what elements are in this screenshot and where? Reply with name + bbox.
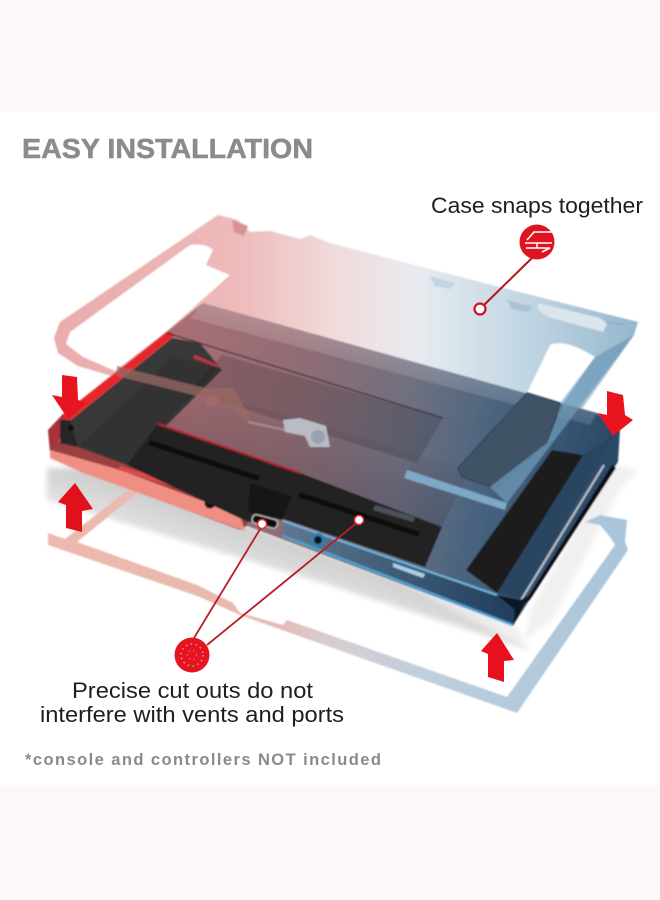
- arrow: down right: [598, 391, 633, 436]
- label: precise cut outs: Precise cut outs do not: [72, 678, 313, 703]
- left lower rim with jack: [50, 445, 248, 531]
- strip and latch over console: [117, 366, 330, 447]
- controller right: [466, 450, 583, 593]
- arrow: up left: [58, 483, 93, 532]
- plate lower edge: [158, 424, 300, 473]
- bottom band: [0, 785, 660, 900]
- translucent top case: [54, 215, 638, 440]
- arrow: down left: [52, 375, 86, 419]
- lower case half: [48, 490, 628, 713]
- product illustration: exploded case and console: [47, 215, 638, 713]
- kickstand panel: [190, 355, 443, 463]
- label: case snaps together: Case snaps together: [431, 193, 643, 218]
- callout: cut outs dot and leaders: [174, 516, 364, 672]
- lower edge of top case: [404, 470, 507, 510]
- left dark area: [60, 338, 222, 465]
- right window over console: [458, 393, 560, 488]
- callout: case snaps icon and leader: [474, 224, 554, 314]
- console reflection: [47, 465, 638, 650]
- top band: [0, 0, 660, 112]
- right case leg: [490, 335, 634, 503]
- footnote: *console and controllers NOT included: [25, 751, 381, 769]
- controller left: [78, 357, 218, 465]
- blue lower rim: [283, 520, 515, 626]
- console body: [48, 303, 620, 626]
- arrow: up right: [481, 633, 514, 682]
- vent block: [127, 424, 442, 567]
- usb-c port: [251, 514, 279, 529]
- left corner rim: [48, 331, 175, 452]
- small red stripe: [193, 355, 220, 368]
- title: EASY INSTALLATION: [22, 133, 313, 164]
- label: precise cut outs: interfere with vents and ports: [40, 702, 344, 727]
- frame details: [538, 303, 607, 332]
